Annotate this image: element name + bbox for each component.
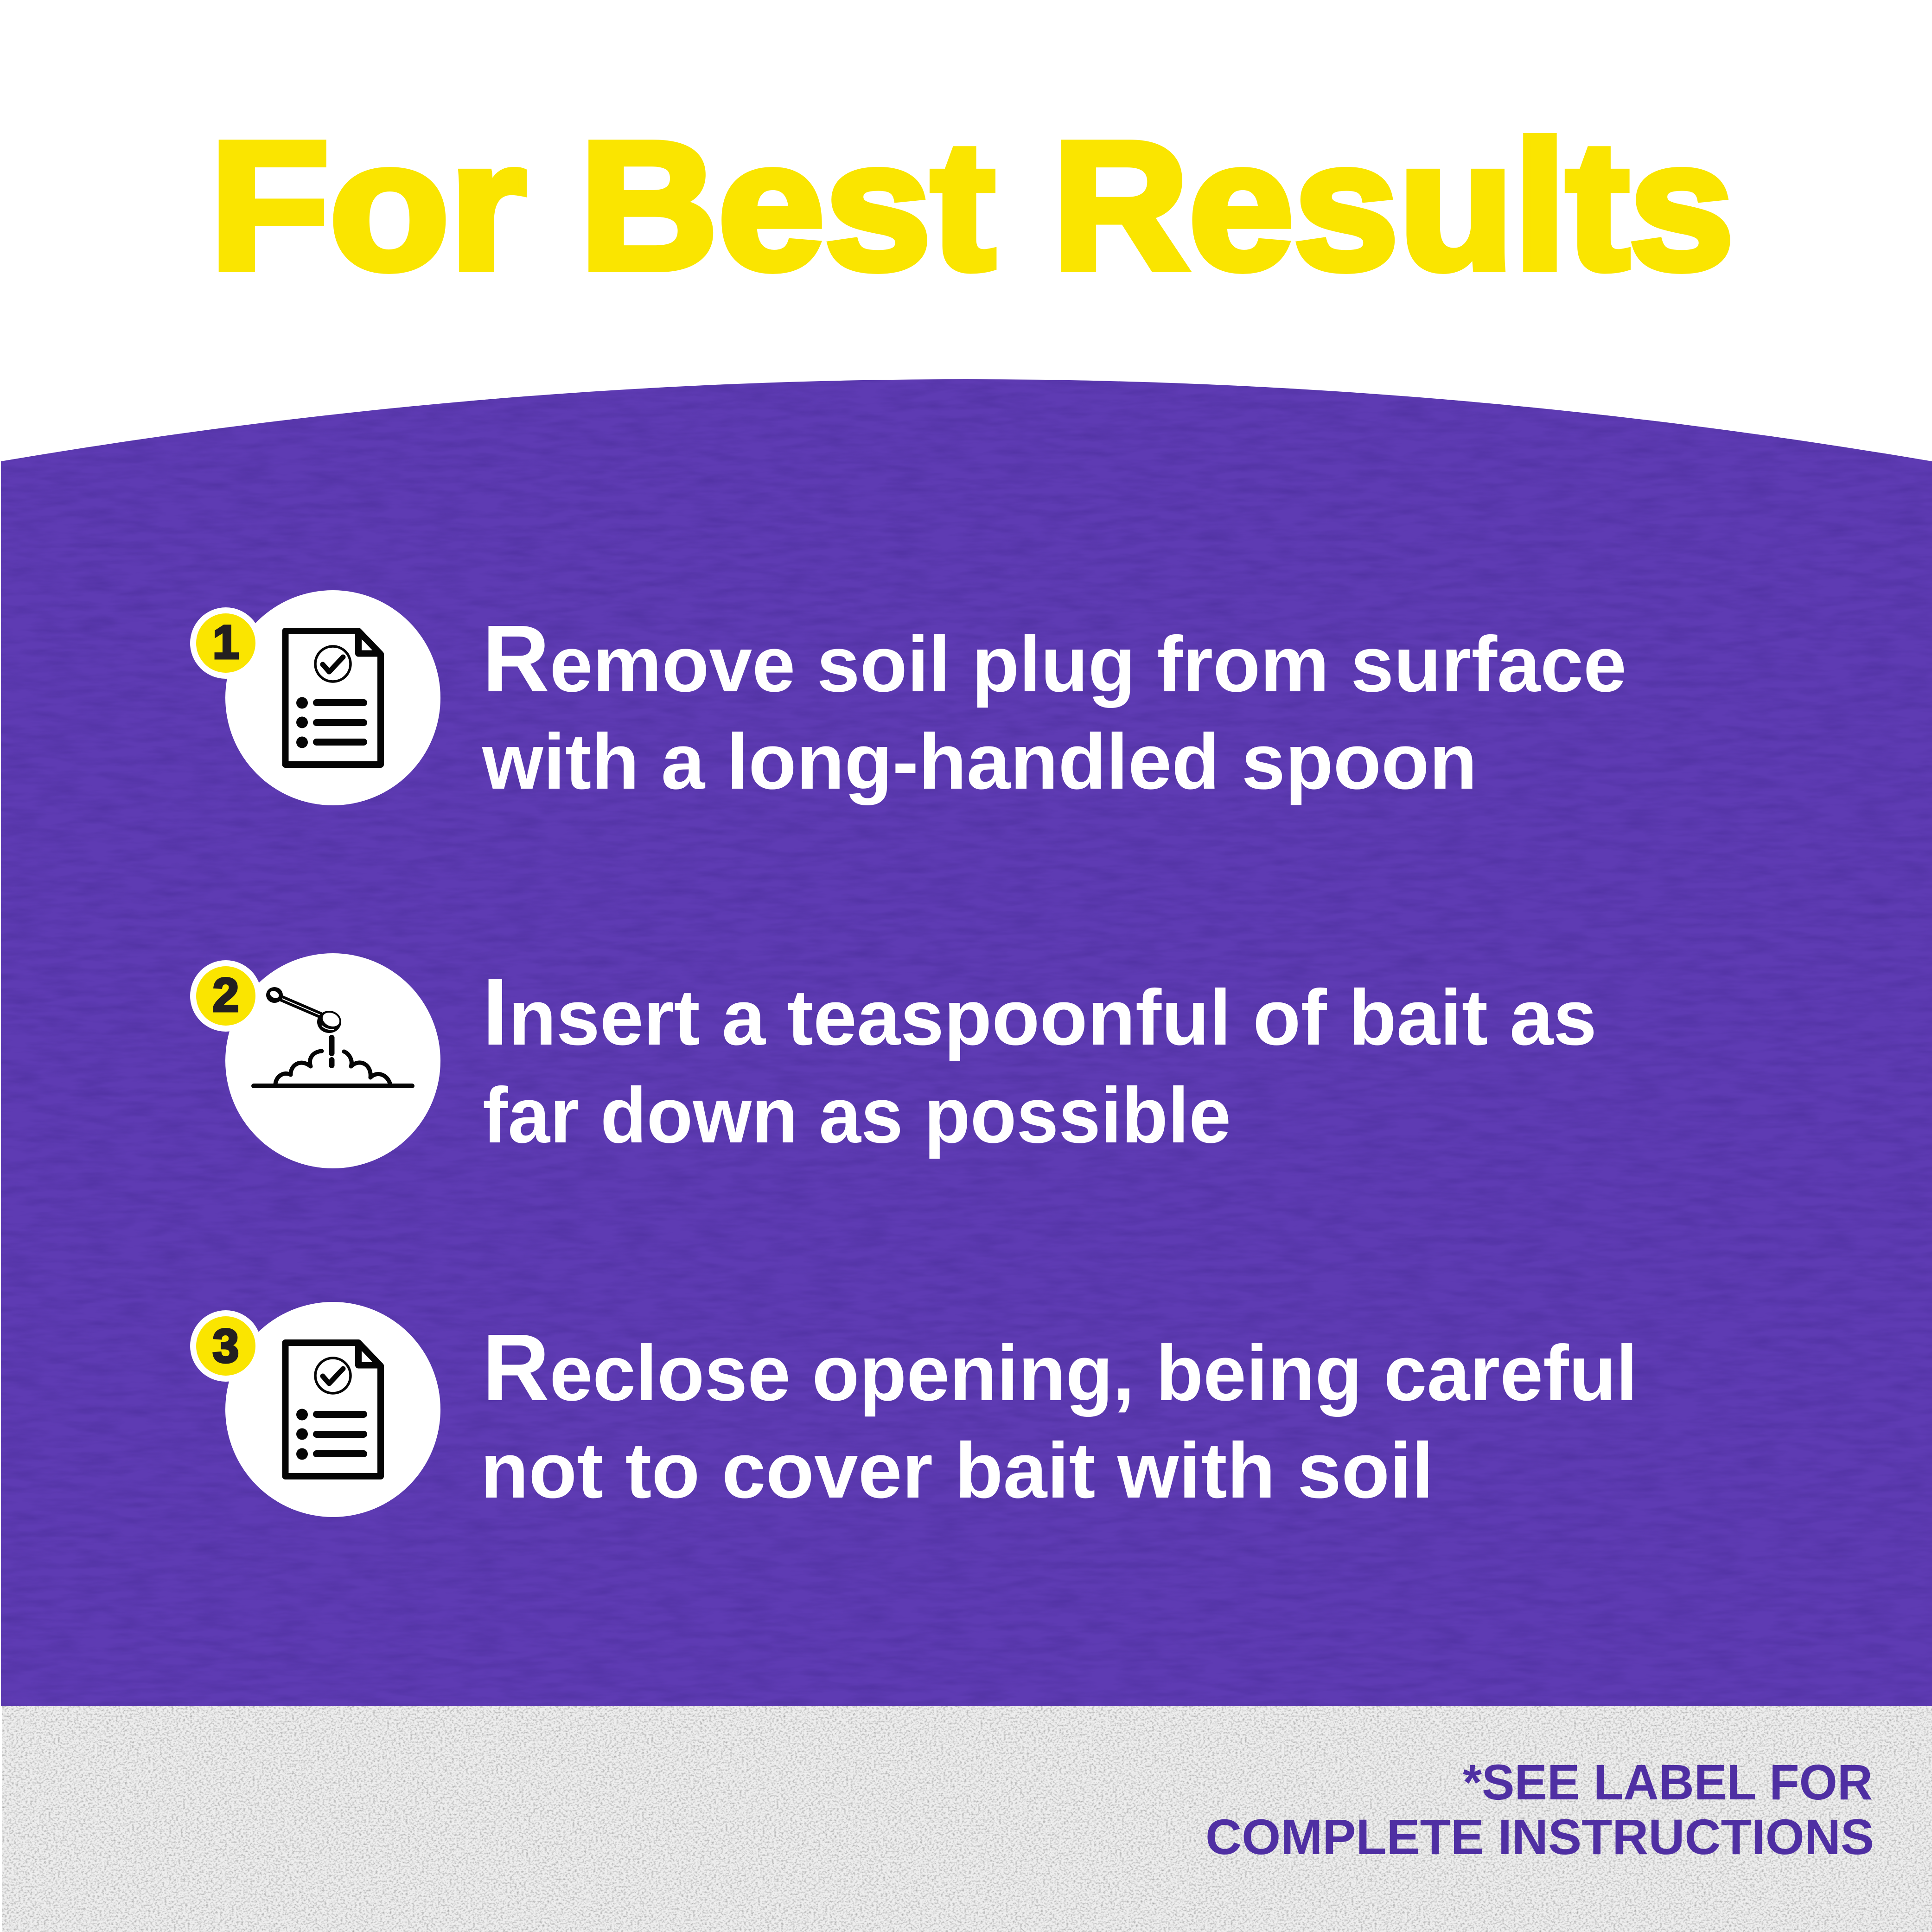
step 3 text: Reclose opening, being careful: [482, 1314, 1638, 1421]
step 3 text: [480, 1314, 1638, 1515]
icon: checklist document: [286, 631, 381, 765]
badge 1: [190, 607, 261, 679]
title: [210, 104, 1734, 307]
icon circle 2: [225, 953, 440, 1168]
step 1 text: Remove soil plug from surface: [482, 606, 1626, 712]
footer note: [1205, 1754, 1874, 1865]
title: Best: [580, 104, 995, 307]
title: For: [210, 104, 526, 307]
footer note: COMPLETE INSTRUCTIONS: [1205, 1809, 1874, 1865]
panel: purple wood background: [1, 379, 1932, 1706]
step 2: [190, 953, 1597, 1168]
step 2 text: [482, 959, 1597, 1160]
badge 2: 2: [213, 969, 239, 1021]
icon: spoon dropping bait on soil mound: [254, 987, 412, 1086]
badge 3: [190, 1310, 261, 1382]
icon circle 1: [225, 590, 440, 805]
step 3 text: not to cover bait with soil: [480, 1427, 1434, 1515]
badge 1: 1: [213, 616, 239, 669]
title: Results: [1052, 104, 1734, 307]
icon: checklist document: [286, 1343, 381, 1476]
step 1 text: [482, 606, 1626, 806]
step 2 text: Insert a teaspoonful of bait as: [482, 959, 1597, 1065]
icon circle 3: [225, 1302, 440, 1517]
footer note: *SEE LABEL FOR: [1463, 1754, 1873, 1810]
step 1: [190, 590, 1626, 806]
panel: grey plaster footer: [2, 1706, 1932, 1932]
step 3: [190, 1302, 1638, 1517]
step 2 text: far down as possible: [483, 1071, 1231, 1160]
badge 3: 3: [213, 1320, 239, 1372]
step 1 text: with a long-handled spoon: [482, 718, 1477, 806]
badge 2: [190, 960, 261, 1032]
